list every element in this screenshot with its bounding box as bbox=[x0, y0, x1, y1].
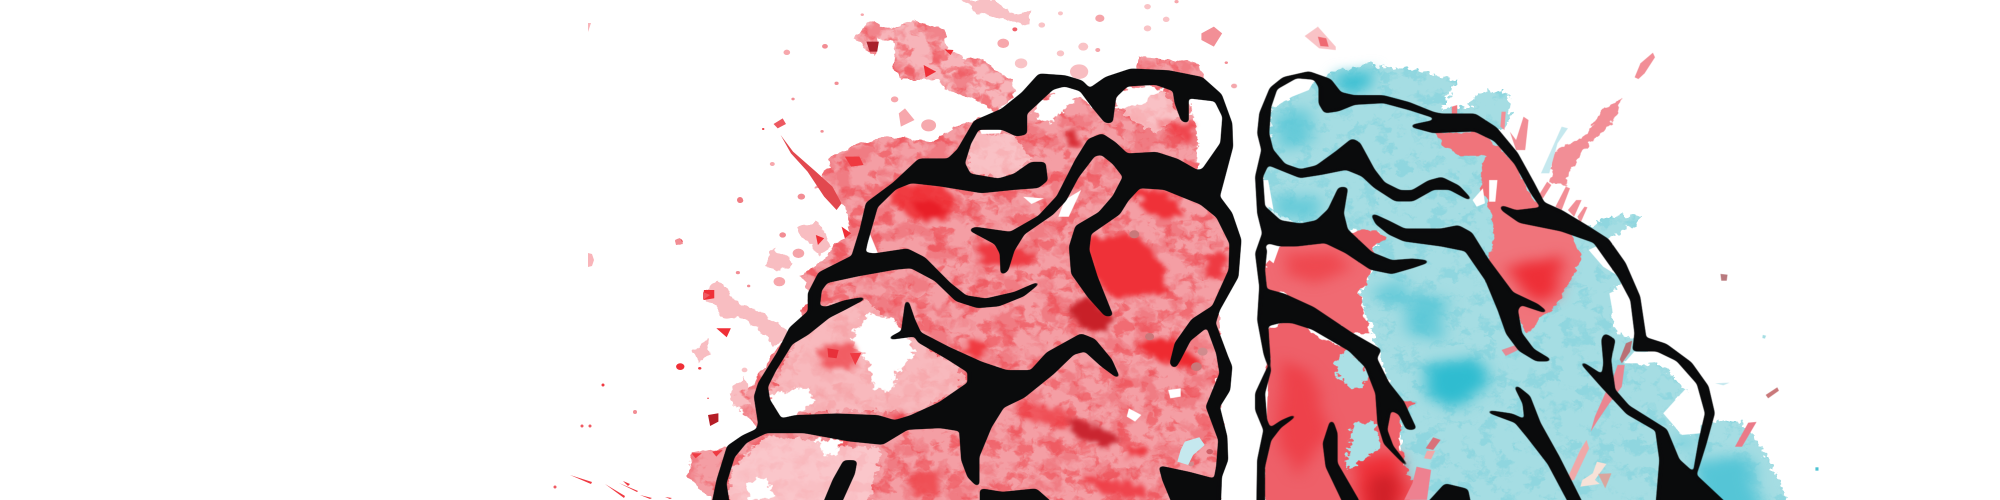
brush streak and small splatters bbox=[675, 0, 1236, 466]
left hemisphere bbox=[675, 0, 1240, 500]
white paper gaps bbox=[1261, 77, 1701, 435]
pale blue holes in the red bbox=[1336, 345, 1379, 467]
black vein outline: left hemisphere bbox=[712, 70, 1240, 500]
saturated red pigment pools bbox=[816, 122, 1228, 498]
right hemisphere bbox=[1231, 27, 1819, 500]
lighter wash: lower left of hemisphere bbox=[725, 90, 1181, 500]
teal and red watercolour wash: right hemisphere bbox=[1231, 27, 1819, 500]
white paper gaps bbox=[745, 85, 1224, 500]
mottled teal pigment bbox=[1263, 63, 1802, 500]
red watercolour areas bbox=[1263, 97, 1622, 500]
deep teal pools bbox=[1271, 70, 1765, 500]
mottled pigment texture bbox=[683, 20, 1239, 500]
pale blue fleck bbox=[1177, 437, 1205, 465]
far-left splatter bbox=[554, 23, 743, 499]
illustration: watercolour brain bbox=[554, 0, 1818, 500]
black vein outline: right hemisphere bbox=[1257, 73, 1732, 500]
red splashes and flecks bbox=[1231, 27, 1819, 500]
red watercolour wash: left hemisphere bbox=[675, 0, 1239, 500]
